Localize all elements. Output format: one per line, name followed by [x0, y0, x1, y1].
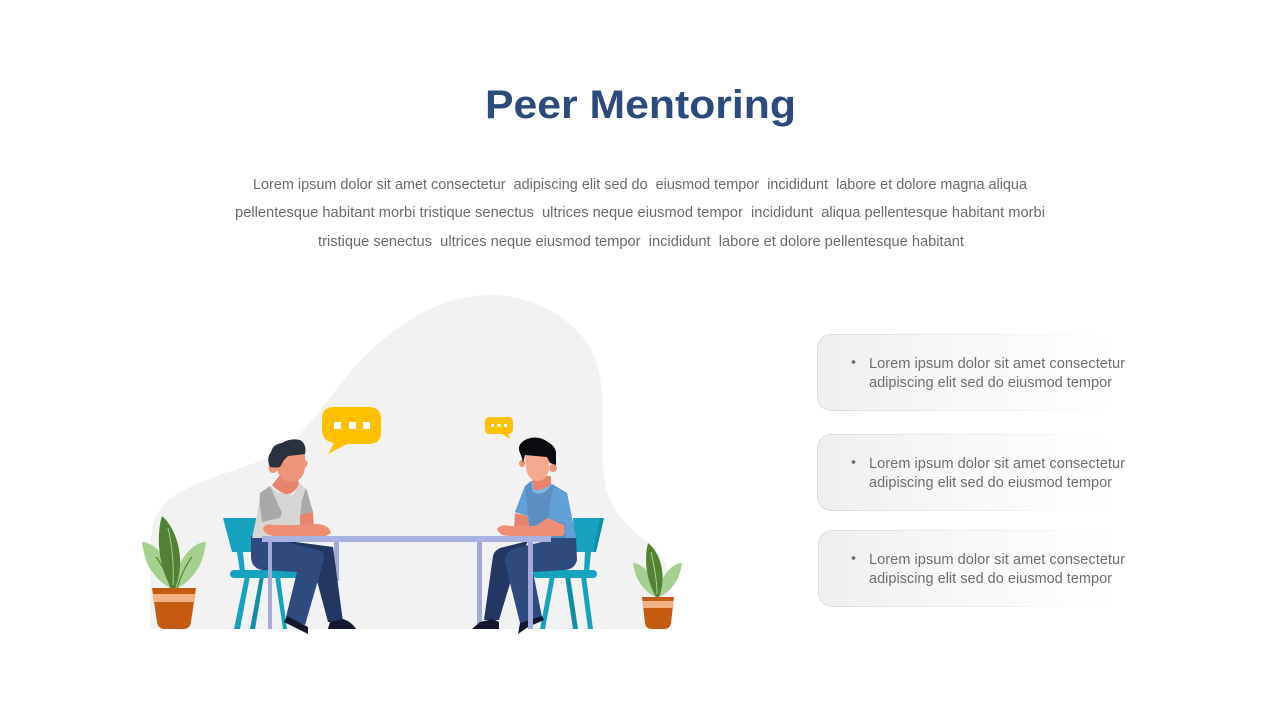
arms [300, 512, 314, 530]
left person: mentor [251, 439, 356, 634]
hair [519, 438, 556, 465]
right person: mentee [472, 438, 577, 634]
title: Peer Mentoring [485, 83, 796, 127]
far shoe [328, 619, 356, 629]
head [525, 454, 549, 481]
near shoe [518, 616, 544, 634]
card 3 [818, 530, 1132, 606]
head [276, 452, 305, 482]
torso [515, 481, 576, 538]
left chair [223, 518, 300, 629]
neck [272, 475, 299, 494]
ears [519, 460, 557, 472]
icon: small speech bubble [485, 417, 513, 439]
card 2: Lorem ipsum dolor sit amet consectetur [869, 456, 1125, 472]
intro paragraph: tristique senectus ultrices neque eiusmod tempor incididunt labore et dolore pellentesque habitant [318, 234, 964, 250]
neck [532, 476, 551, 490]
near leg [505, 536, 577, 623]
hair [268, 439, 305, 468]
intro paragraph: pellentesque habitant morbi tristique senectus ultrices neque eiusmod tempor incididunt aliqua pellentesque habitant morbi [235, 205, 1045, 221]
icon: left plant [142, 516, 206, 629]
icon: right plant [633, 543, 682, 629]
intro paragraph: Lorem ipsum dolor sit amet consectetur adipiscing elit sed do eiusmod tempor incididunt labore et dolore magna aliqua [253, 177, 1028, 193]
card 1 [818, 334, 1130, 410]
card 2 [818, 434, 1130, 510]
card 2: adipiscing elit sed do eiusmod tempor [869, 475, 1112, 491]
icon: large speech bubble [322, 407, 381, 454]
shirt collar [531, 482, 552, 494]
far leg [288, 541, 343, 622]
ears [269, 460, 308, 473]
background blob [150, 295, 672, 629]
sleeves [260, 486, 313, 522]
intro paragraph [235, 177, 1045, 250]
card 1: adipiscing elit sed do eiusmod tempor [869, 375, 1112, 391]
card 3: Lorem ipsum dolor sit amet consectetur [869, 552, 1125, 568]
arms [514, 513, 529, 528]
table [262, 536, 551, 629]
near shoe [284, 616, 308, 634]
card 1: Lorem ipsum dolor sit amet consectetur [869, 356, 1125, 372]
right chair [520, 518, 604, 629]
back table legs [334, 541, 482, 629]
near leg [251, 536, 324, 625]
sleeve [515, 486, 576, 538]
torso [252, 483, 313, 538]
illustration: peer mentoring scene [142, 295, 682, 634]
card 3: adipiscing elit sed do eiusmod tempor [869, 571, 1112, 587]
far shoe [472, 619, 499, 629]
far leg [484, 541, 528, 620]
